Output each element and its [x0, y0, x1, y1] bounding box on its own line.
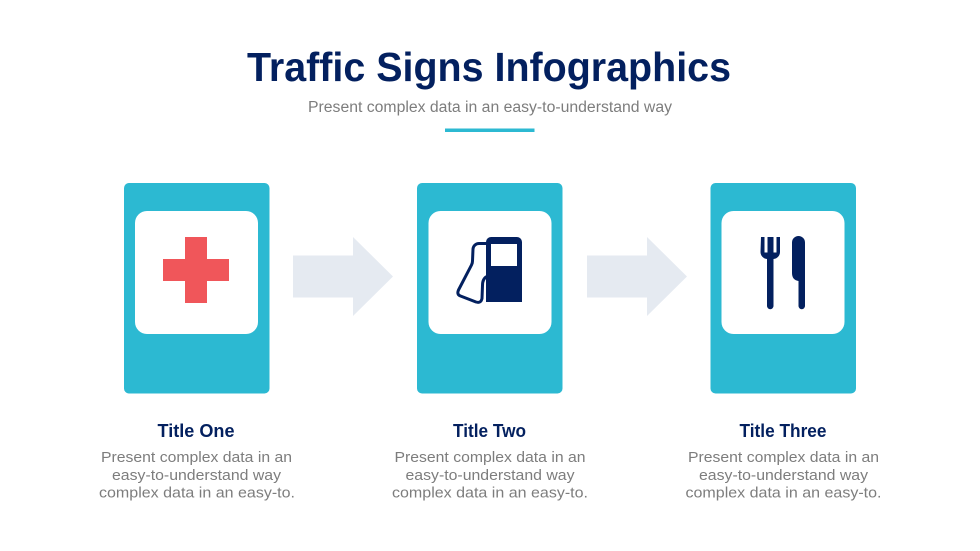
panel: sign one (medical) — [124, 183, 270, 394]
body text: easy-to-understand way — [406, 467, 575, 484]
sign face — [722, 211, 844, 334]
panel: sign two (fuel) — [417, 183, 562, 394]
icon: fuel pump — [458, 237, 522, 302]
text block: title three — [686, 421, 882, 502]
body text — [686, 449, 882, 502]
panel: sign three (restaurant) — [710, 183, 856, 394]
arrow: two to three — [587, 237, 687, 316]
body text: Present complex data in an — [101, 449, 292, 466]
body text: complex data in an easy-to. — [686, 484, 882, 502]
heading: Title Three — [740, 421, 826, 441]
text block: title one — [99, 421, 295, 502]
icon: red cross — [163, 237, 229, 303]
body text: Present complex data in an — [394, 449, 586, 466]
body text: complex data in an easy-to. — [99, 484, 295, 502]
sign face — [135, 211, 258, 334]
icon: fork and knife — [760, 236, 805, 309]
sign board — [417, 183, 562, 394]
body text: easy-to-understand way — [699, 467, 869, 484]
text block: title two — [392, 421, 588, 502]
arrow: one to two — [293, 237, 393, 316]
body text: Present complex data in an — [688, 449, 879, 466]
heading: Title Two — [453, 421, 526, 441]
body text: easy-to-understand way — [112, 467, 282, 484]
sign face — [428, 211, 552, 334]
body text: complex data in an easy-to. — [392, 484, 588, 502]
heading: Title One — [158, 421, 234, 441]
sign board — [124, 183, 270, 394]
title: Traffic Signs Infographics — [247, 44, 731, 90]
subtitle: Present complex data in an easy-to-understand way — [308, 99, 672, 116]
body text — [392, 449, 588, 502]
body text — [99, 449, 295, 502]
title underline — [445, 128, 534, 132]
sign board — [710, 183, 856, 394]
